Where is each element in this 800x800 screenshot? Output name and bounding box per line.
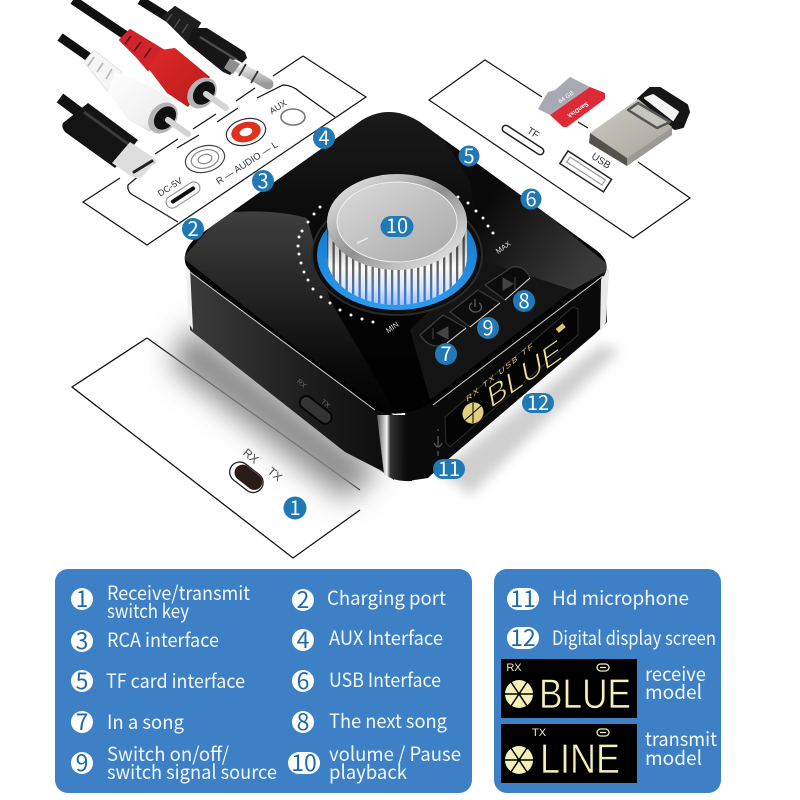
device drop shadows	[170, 325, 620, 500]
item 10: 10	[291, 744, 317, 778]
item 10	[288, 738, 461, 785]
icon: previous	[433, 327, 448, 339]
item 12	[507, 619, 716, 653]
badge 4: 4	[318, 122, 330, 151]
badge 4	[313, 122, 335, 151]
display screen: BLUE	[485, 331, 564, 415]
panel: feature list	[55, 569, 472, 793]
port: white RCA	[182, 141, 228, 177]
badge 6: 6	[525, 183, 537, 212]
panel outline: card and USB callout box	[429, 60, 690, 238]
cable: white RCA plug	[60, 37, 188, 139]
item 8: 8	[297, 703, 309, 737]
badge 9	[477, 312, 499, 341]
right front face	[405, 270, 607, 481]
item 7: 7	[76, 703, 88, 737]
microphone icon	[434, 429, 442, 456]
item 4	[292, 621, 443, 655]
badge 5	[458, 140, 480, 169]
badge 8	[513, 285, 535, 314]
item 8	[292, 703, 447, 737]
transmit mode display	[501, 724, 637, 783]
item 5: TF card interface	[106, 665, 245, 694]
label: MAX: MAX	[494, 239, 513, 256]
panel: microphone and display modes	[494, 569, 721, 793]
panel outline: switch key callout box	[72, 338, 360, 558]
TF memory card: SanDisk	[565, 100, 589, 118]
item 3: RCA interface	[107, 624, 219, 653]
side slide switch: TX	[319, 399, 331, 410]
item 10: playback	[329, 756, 407, 785]
item 1: Receive/transmit	[107, 577, 251, 606]
badge 10: 10	[386, 210, 408, 239]
receive mode display: BLUE	[539, 670, 631, 717]
icon: power	[470, 299, 482, 312]
label: DC-5V: DC-5V	[156, 175, 184, 199]
icon: next	[503, 277, 515, 291]
item 7: In a song	[107, 706, 184, 735]
item 5	[71, 662, 245, 696]
item 2	[292, 581, 447, 615]
number badges on illustration	[182, 122, 554, 521]
transmit mode display: LINE	[540, 735, 620, 782]
badge 1	[284, 492, 306, 521]
item 3	[71, 622, 219, 656]
display screen: RX TX USB TF	[466, 341, 533, 404]
label: R-AUDIO-L: R — AUDIO — L	[214, 139, 280, 187]
label: MIN: MIN	[384, 320, 400, 335]
item 3: 3	[76, 622, 88, 656]
item 2: Charging port	[327, 582, 447, 611]
item 6	[292, 662, 441, 696]
badge 12: 12	[527, 387, 549, 416]
item 7	[71, 703, 184, 737]
badge 12	[522, 387, 554, 416]
badge 1: 1	[289, 492, 301, 521]
badge 2	[182, 213, 204, 242]
display screen	[445, 307, 578, 447]
item 12: 12	[510, 619, 536, 653]
item 11: Hd microphone	[552, 582, 689, 611]
right end highlight	[600, 266, 609, 332]
label: USB: USB	[589, 151, 613, 172]
badge 5: 5	[463, 140, 475, 169]
item 9: switch signal source	[107, 756, 277, 785]
caption: transmit model: model	[645, 742, 702, 771]
item 11: 11	[510, 580, 536, 614]
TF memory card: 64 GB	[558, 90, 575, 105]
item 12: Digital display screen	[552, 622, 716, 651]
item 1: switch key	[107, 595, 189, 624]
badge 11	[433, 453, 465, 482]
device body	[180, 100, 620, 481]
side slide switch	[295, 378, 334, 426]
item 1: 1	[76, 580, 88, 614]
item 4: 4	[297, 621, 310, 655]
USB flash drive	[589, 88, 689, 166]
top face	[184, 112, 607, 414]
label: AUX: AUX	[268, 98, 288, 116]
item 9: 9	[76, 744, 88, 778]
item 1	[71, 577, 251, 624]
port: red RCA	[223, 114, 269, 150]
volume scale dots	[296, 196, 494, 324]
badge 3: 3	[257, 165, 269, 194]
panel outline: rear ports callout box	[83, 56, 366, 245]
side slide switch: RX	[295, 378, 307, 390]
switch RX TX diagram	[226, 447, 284, 497]
badge 10	[380, 210, 414, 239]
front corner	[377, 415, 412, 481]
transmit mode display: TX	[532, 727, 547, 739]
item 2: 2	[297, 581, 309, 615]
label: TF: TF	[525, 125, 541, 141]
switch RX TX diagram: TX	[265, 465, 284, 484]
TF slot	[501, 124, 545, 156]
top edge highlights	[190, 272, 603, 410]
item 6: USB Interface	[329, 664, 441, 693]
badge 6	[520, 183, 542, 212]
cable: USB-C plug	[60, 98, 157, 178]
item 9	[71, 738, 277, 785]
item 9: Switch on/off/	[107, 738, 229, 767]
badge 2: 2	[187, 213, 199, 242]
port: AUX	[281, 109, 305, 125]
caption: transmit model	[645, 723, 718, 771]
item 6: 6	[297, 662, 309, 696]
caption: receive model: receive	[645, 658, 706, 687]
TF memory card	[538, 77, 605, 127]
cable: 3.5mm AUX plug	[140, 0, 268, 84]
USB slot	[560, 151, 612, 192]
caption: receive model	[645, 658, 706, 705]
left side face	[188, 262, 400, 480]
item 8: The next song	[329, 705, 447, 734]
badge 9: 9	[482, 312, 494, 341]
item 4: AUX Interface	[329, 622, 443, 651]
badge 3	[252, 165, 274, 194]
item 5: 5	[76, 662, 88, 696]
port: DC-5V USB-C	[164, 180, 202, 210]
receive mode display: RX	[506, 662, 522, 674]
badge 8: 8	[518, 285, 530, 314]
badge 7	[435, 338, 457, 367]
item 11	[507, 580, 689, 614]
volume knob	[312, 174, 482, 315]
item 10: volume / Pause	[329, 738, 461, 767]
caption: transmit model: transmit	[645, 723, 718, 752]
buttons	[420, 267, 530, 346]
badge 7: 7	[440, 338, 452, 367]
switch RX TX diagram: RX	[240, 447, 261, 467]
caption: receive model: model	[645, 676, 702, 705]
receive mode display	[501, 659, 637, 718]
badge 11: 11	[438, 453, 460, 482]
cable: red RCA plug	[73, 0, 226, 114]
left corner highlight	[186, 262, 193, 330]
